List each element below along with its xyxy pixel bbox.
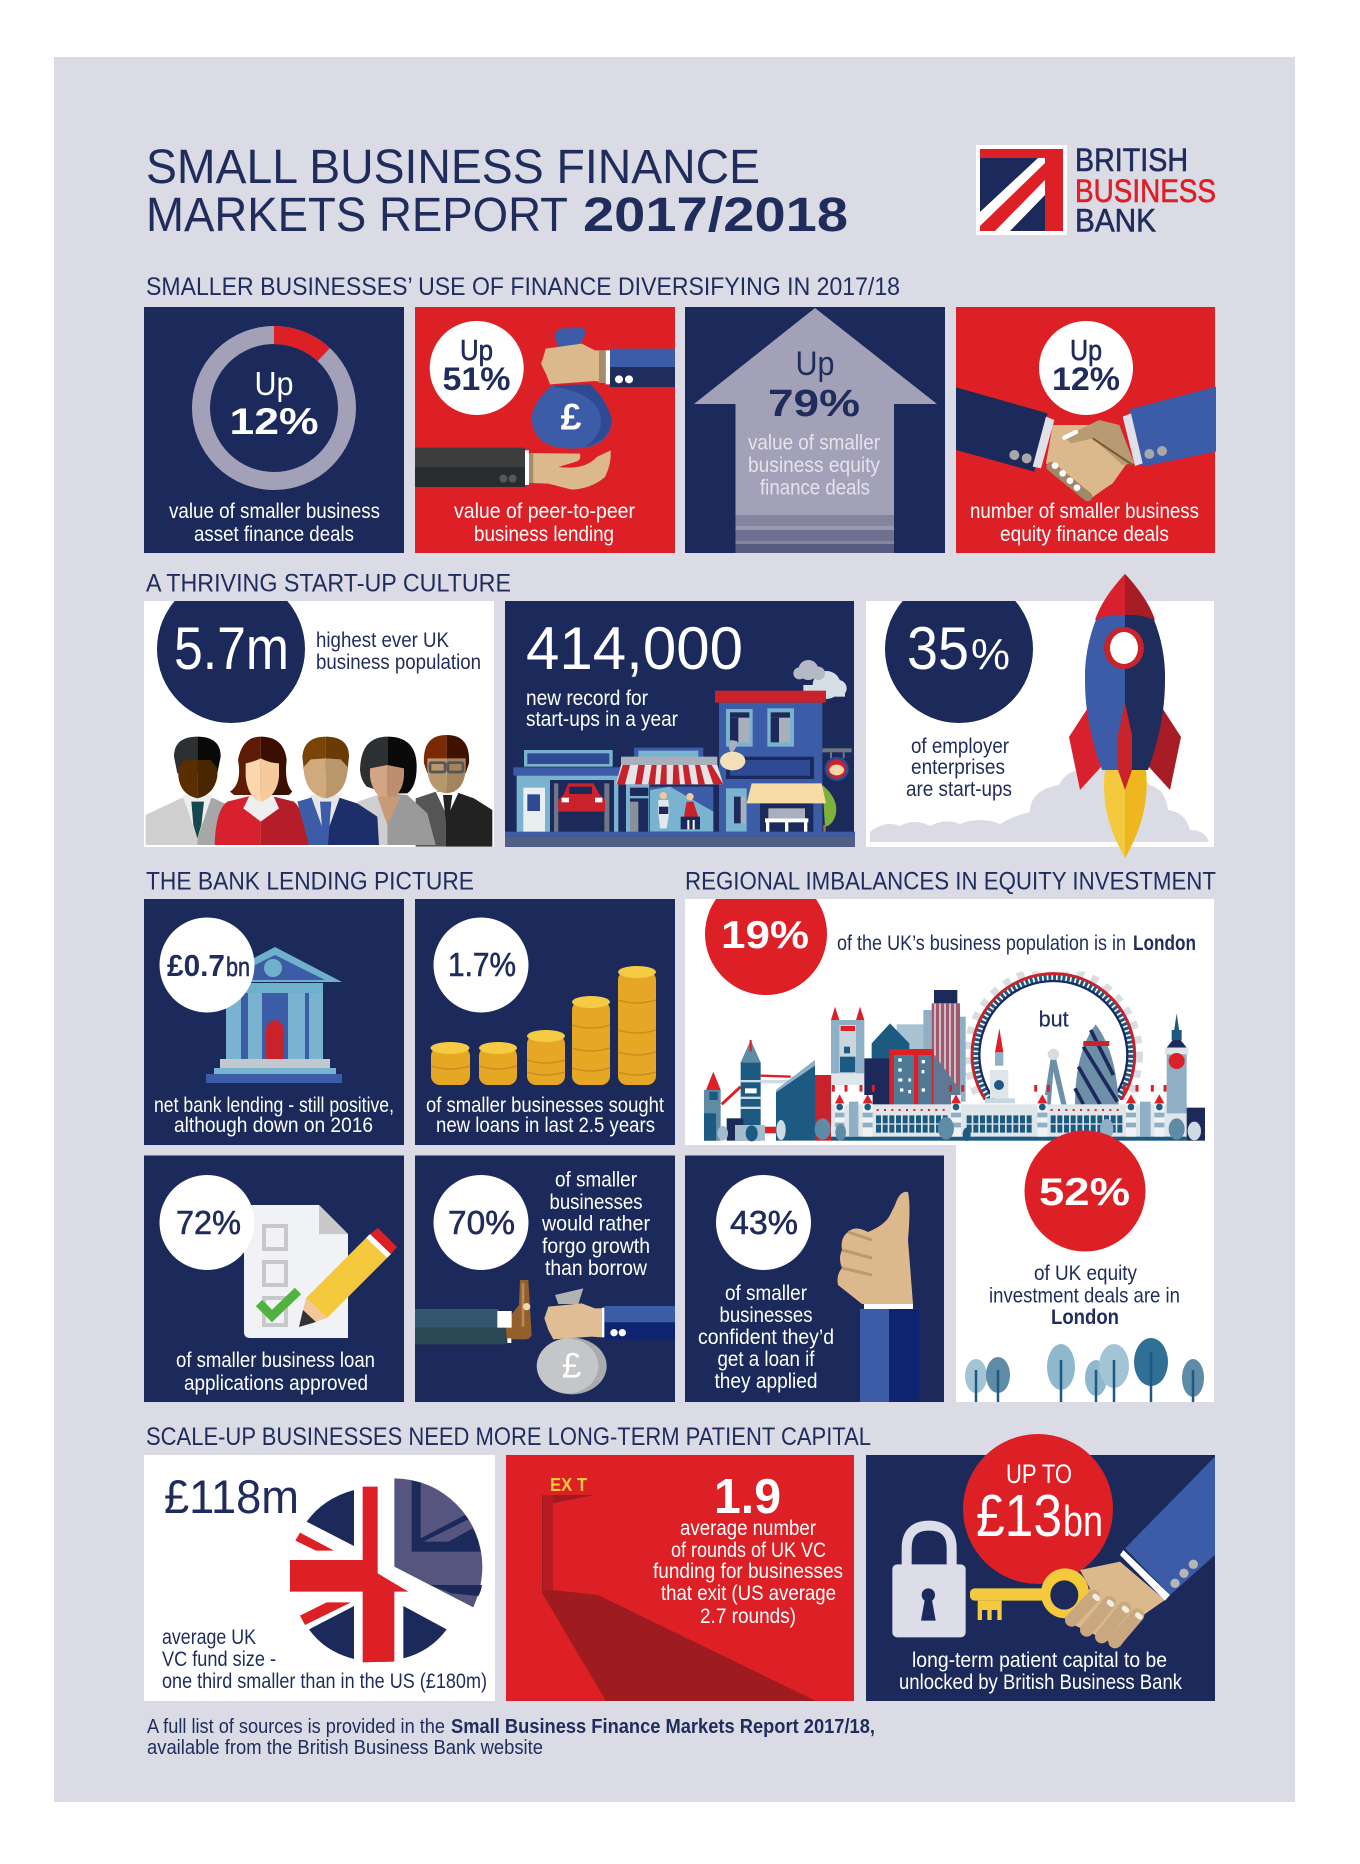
panel: £118m VC fund size (144, 1455, 495, 1701)
panel: 43% confident: confident they’d (698, 1326, 834, 1349)
tall blue building (715, 691, 836, 833)
footer sources note: Small Business Finance Markets Report 2017/18, (451, 1716, 875, 1738)
panel: up to £13bn: UP TO (1006, 1459, 1072, 1489)
panel: equity number up 12% (956, 307, 1216, 553)
icon: declined money bag: £ (562, 1346, 581, 1385)
panel: 1.9 rounds to exit: 1.9 (714, 1470, 781, 1524)
panel: 52% in London: investment deals are in (989, 1284, 1180, 1308)
panel: net bank lending: £0.7 (167, 948, 225, 983)
icon: exit door shadow (542, 1475, 816, 1701)
panel: 1.9 rounds to exit: 2.7 rounds) (700, 1605, 796, 1628)
panel: £118m VC fund size: average UK (162, 1626, 256, 1649)
panel: 70% forgo growth (415, 1156, 675, 1402)
title: 2017/2018 (583, 189, 848, 242)
icon: hands passing money bag (415, 327, 675, 490)
icon: hands passing money bag: £ (561, 396, 582, 438)
smoke cloud (793, 660, 847, 699)
panel: 35% of enterprises: are start-ups (906, 778, 1012, 801)
icon: five business people (146, 735, 492, 847)
panel: 35% of enterprises: enterprises (911, 756, 1005, 779)
panel: peer-to-peer up 51%: business lending (474, 523, 614, 546)
panel: asset finance up 12% (144, 307, 404, 553)
person 1 (146, 737, 226, 845)
person 2 (215, 737, 309, 845)
person 5 (416, 735, 492, 847)
footer sources note (147, 1716, 875, 1759)
panel: up to £13bn (866, 1434, 1215, 1701)
left towers and bridge (704, 1040, 791, 1141)
panel: 1.9 rounds to exit: funding for businesses (653, 1560, 843, 1583)
heading: regional imbalances: REGIONAL IMBALANCES IN EQUITY INVESTMENT (685, 868, 1216, 896)
panel: 35% of enterprises: 35 (907, 615, 969, 682)
panel: sought new loans: new loans in last 2.5 years (436, 1114, 655, 1137)
icon: padlock and key (892, 1457, 1215, 1647)
panel: 1.9 rounds to exit (506, 1455, 854, 1701)
panel: 70% forgo growth: of smaller (555, 1168, 637, 1192)
panel: 52% in London: of UK equity (1034, 1262, 1137, 1285)
panel: sought new loans: 1.7% (448, 946, 516, 983)
icon: exit door shadow: EX T (550, 1475, 587, 1495)
panel: asset finance up 12%: value of smaller business (169, 500, 380, 523)
icon: checklist and pencil (244, 1205, 397, 1338)
panel: up to £13bn: unlocked by British Business Bank (899, 1671, 1182, 1694)
panel: 5.7m business population: business population (316, 651, 481, 674)
panel: 70% forgo growth: 70% (448, 1204, 515, 1241)
panel: sought new loans (415, 899, 675, 1145)
panel: 72% approved (144, 1156, 404, 1402)
parliament (831, 1085, 1187, 1141)
tall modern buildings (864, 990, 966, 1105)
panel: equity value up 79% (685, 307, 945, 553)
clock spire (985, 1028, 1015, 1103)
icon: thumbs up (838, 1192, 919, 1402)
panel: net bank lending: net bank lending - still positive, (154, 1094, 394, 1117)
icon: declined money bag (415, 1280, 675, 1394)
heading: finance diversifying: SMALLER BUSINESSES’ USE OF FINANCE DIVERSIFYING IN 2017/18 (146, 273, 900, 301)
panel: 19% in London: of the UK’s business population is in (837, 932, 1126, 955)
panel: 72% approved: 72% (176, 1204, 241, 1241)
panel: equity number up 12%: Up (1070, 335, 1102, 367)
panel: 19% in London: 19% (721, 914, 809, 957)
street (505, 832, 855, 847)
hanging sign (822, 748, 852, 781)
panel: 5.7m business population: highest ever UK (316, 629, 449, 652)
heading: scale-up: SCALE-UP BUSINESSES NEED MORE LONG-TERM PATIENT CAPITAL (146, 1423, 871, 1451)
panel: peer-to-peer up 51%: value of peer-to-peer (454, 500, 635, 523)
panel: equity value up 79%: value of smaller (748, 432, 880, 454)
logo: British Business Bank: BUSINESS (1075, 173, 1216, 209)
panel: 5.7m business population: 5.7m (174, 615, 289, 682)
panel: £118m VC fund size: £118m (164, 1470, 299, 1523)
panel: £118m VC fund size: VC fund size - (162, 1648, 276, 1671)
panel: peer-to-peer up 51%: 51% (442, 361, 510, 397)
panel: 1.9 rounds to exit: average number (680, 1517, 816, 1540)
panel: 70% forgo growth: forgo growth (542, 1235, 650, 1258)
icon: trees (965, 1338, 1204, 1402)
panel: 414,000 start-ups: new record for (526, 687, 648, 710)
logo: British Business Bank: BRITISH (1075, 142, 1188, 178)
icon: bank building (206, 947, 342, 1083)
panel: equity value up 79%: business equity (748, 454, 880, 477)
panel: 70% forgo growth: than borrow (545, 1257, 648, 1280)
title: MARKETS REPORT (146, 189, 568, 242)
panel: equity number up 12%: equity finance deals (1000, 523, 1169, 546)
Ferris wheel (966, 972, 1143, 1100)
panel: 1.9 rounds to exit: that exit (US average (661, 1582, 836, 1605)
panel: 5.7m business population (144, 575, 494, 847)
panel: 414,000 start-ups (505, 601, 855, 847)
panel: equity number up 12%: number of smaller business (970, 500, 1199, 523)
title: SMALL BUSINESS FINANCE (146, 141, 760, 194)
panel: 35% of enterprises: of employer (911, 735, 1009, 758)
panel: 43% confident: they applied (714, 1370, 818, 1393)
clouds (870, 768, 1209, 842)
panel: net bank lending: although down on 2016 (174, 1114, 373, 1137)
panel: 19% in London: London (1133, 932, 1196, 955)
logo: British Business Bank: BANK (1075, 202, 1156, 238)
panel: sought new loans: of smaller businesses sought (426, 1094, 664, 1117)
icon: up arrow (694, 308, 937, 553)
panel: 70% forgo growth: would rather (541, 1212, 650, 1236)
panel: peer-to-peer up 51% (415, 307, 675, 553)
heading: bank lending: THE BANK LENDING PICTURE (146, 868, 474, 896)
panel: up to £13bn: £13 (976, 1483, 1062, 1549)
eye pylons (1043, 1049, 1067, 1105)
skyline trees (717, 1117, 1201, 1141)
heading: start-up culture: A THRIVING START-UP CULTURE (146, 570, 511, 598)
panel: 43% confident: of smaller (725, 1282, 807, 1305)
panel: £118m VC fund size: one third smaller than in the US (£180m) (162, 1670, 487, 1693)
panel: asset finance up 12%: 12% (230, 401, 318, 442)
title (146, 141, 848, 242)
coffee cup sign (720, 740, 745, 770)
panel: 43% confident (685, 1156, 944, 1402)
icon: Union flag pie (290, 1478, 482, 1662)
icon: coin stacks (430, 966, 656, 1085)
panel: asset finance up 12%: asset finance deals (194, 523, 354, 546)
panel: equity number up 12%: 12% (1052, 361, 1120, 397)
panel: equity value up 79%: 79% (768, 383, 860, 425)
panel: equity value up 79%: finance deals (760, 476, 870, 500)
panel: 70% forgo growth: businesses (550, 1191, 642, 1214)
panel: equity value up 79%: Up (796, 345, 834, 383)
panel: 52% in London: London (1051, 1306, 1119, 1329)
panel: 52% in London (965, 1130, 1204, 1402)
panel: 52% in London: 52% (1039, 1171, 1130, 1214)
panel: 72% approved: applications approved (184, 1372, 368, 1395)
panel: net bank lending (144, 899, 404, 1145)
icon: rocket (1069, 574, 1181, 858)
illustration: London skyline (704, 969, 1205, 1141)
donut chart (201, 335, 347, 481)
panel: up to £13bn: bn (1063, 1497, 1103, 1546)
panel: up to £13bn: long-term patient capital to be (912, 1649, 1167, 1672)
panel: asset finance up 12%: Up (254, 365, 294, 402)
person 4 (357, 737, 436, 845)
castle tower (831, 1007, 864, 1085)
gherkin (1075, 1024, 1119, 1105)
panel: 414,000 start-ups: 414,000 (526, 615, 743, 682)
panel: 35% of enterprises (866, 574, 1214, 858)
footer sources note: available from the British Business Bank website (147, 1737, 543, 1759)
illustration: London skyline: but (1039, 1007, 1069, 1032)
panel: 72% approved: of smaller business loan (176, 1349, 375, 1372)
panel: net bank lending: bn (226, 952, 250, 982)
panel: 43% confident: businesses (720, 1304, 812, 1327)
footer sources note: A full list of sources is provided in the (147, 1716, 445, 1738)
logo: British Business Bank (976, 142, 1216, 238)
Big Ben (1165, 1013, 1205, 1141)
panel: peer-to-peer up 51%: Up (460, 335, 493, 367)
icon: high street shops (505, 660, 855, 847)
panel: 35% of enterprises: % (971, 630, 1010, 679)
person 3 (297, 737, 379, 845)
panel: 43% confident: 43% (730, 1204, 798, 1241)
shop with awning (616, 748, 723, 833)
icon: handshake (956, 387, 1216, 498)
panel: 19% in London (685, 873, 1214, 1402)
panel: 1.9 rounds to exit: of rounds of UK VC (671, 1539, 826, 1562)
garage (513, 750, 620, 832)
panel: 414,000 start-ups: start-ups in a year (526, 708, 678, 731)
panel: 43% confident: get a loan if (718, 1348, 815, 1371)
highlighted slice (394, 1478, 482, 1607)
shard block (776, 1060, 831, 1141)
